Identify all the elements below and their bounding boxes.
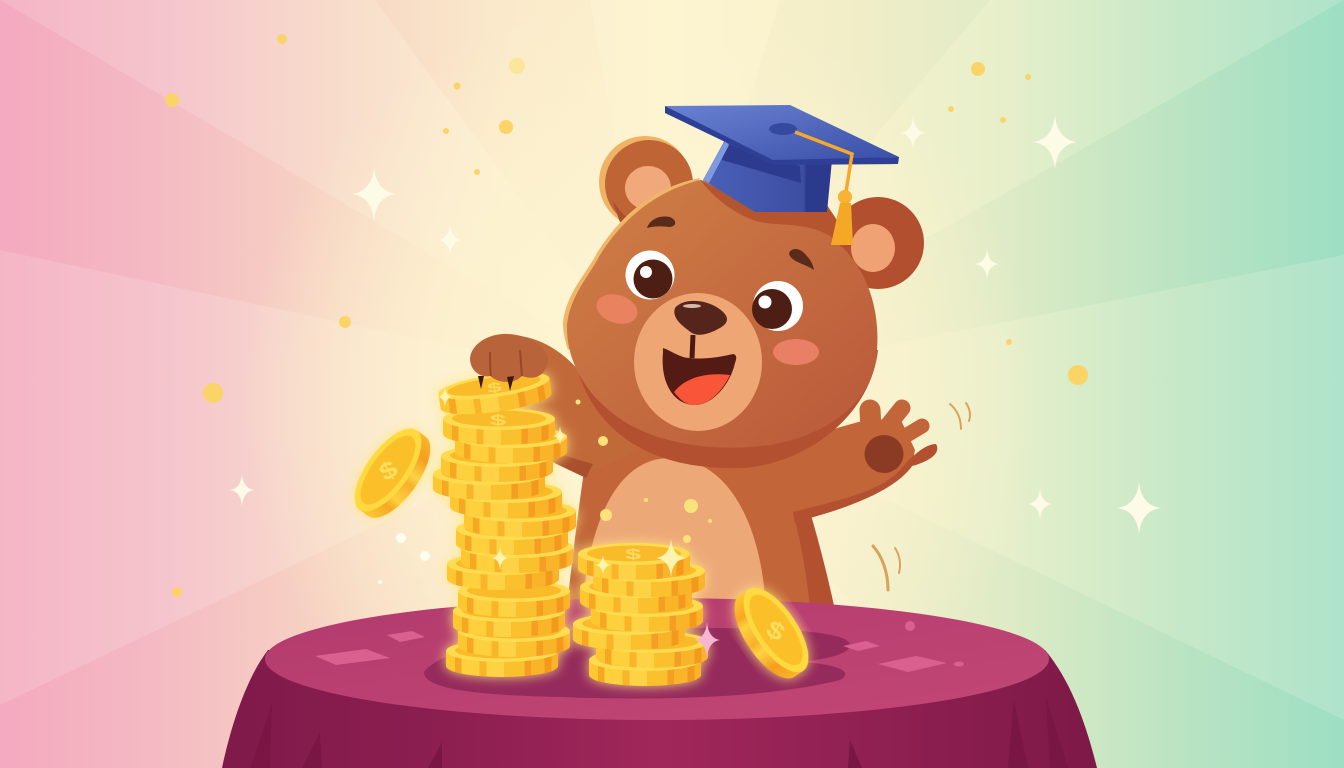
tassel <box>831 203 853 245</box>
dollar sign: $ <box>762 614 790 646</box>
head highlight rim <box>563 178 700 350</box>
left cheek <box>593 289 641 329</box>
muzzle <box>634 293 762 431</box>
arm underside <box>793 444 937 522</box>
dollar sign on short stack: $ <box>625 545 641 562</box>
right flying coin <box>722 578 821 689</box>
right cheek <box>773 339 819 365</box>
table diamonds <box>315 621 964 672</box>
button <box>769 123 797 135</box>
short coin stack <box>573 543 708 686</box>
white dots near flying coin <box>378 533 430 584</box>
table top shadow <box>424 628 850 698</box>
palm pad <box>864 435 904 473</box>
coin sparkles <box>438 387 720 658</box>
tilted top coin: $ <box>486 380 503 396</box>
chin shadow <box>578 350 878 468</box>
skirt folds <box>250 698 1068 768</box>
cap base light edge <box>703 141 729 183</box>
open mouth <box>663 348 736 405</box>
left flying coin <box>342 418 443 528</box>
tongue <box>674 374 730 405</box>
bear paw on coin <box>470 334 548 391</box>
tilted top coin <box>437 367 553 420</box>
nose <box>674 301 727 335</box>
head shape <box>567 180 877 448</box>
tassel knob <box>838 190 852 204</box>
body side shadow <box>793 505 838 625</box>
right eyebrow <box>789 249 814 270</box>
board underside <box>665 106 899 165</box>
tall coin stack <box>433 367 576 677</box>
nose highlight <box>683 304 701 308</box>
fingers <box>870 408 922 438</box>
left ear <box>599 136 693 228</box>
table skirt <box>222 650 1097 768</box>
waving right arm <box>790 408 937 522</box>
right ear <box>832 197 924 289</box>
glitter on belly <box>576 400 712 543</box>
graduation cap <box>665 105 899 245</box>
table <box>222 598 1097 768</box>
motion lines near paw <box>873 403 970 590</box>
right eye <box>752 281 803 331</box>
table top <box>265 598 1049 720</box>
background sparkles <box>230 115 1161 534</box>
left eye <box>626 250 674 300</box>
dollar sign on stack: $ <box>490 411 506 428</box>
head <box>563 178 878 468</box>
body <box>565 430 838 625</box>
claws <box>478 376 484 389</box>
belly <box>582 458 766 620</box>
board top <box>665 105 899 160</box>
hat shadow on head <box>700 180 850 248</box>
raised left arm <box>490 335 650 478</box>
cap base top shade <box>722 143 801 183</box>
bear <box>490 105 937 625</box>
tassel cord <box>795 132 852 192</box>
left eyebrow <box>647 216 675 228</box>
floating gold dots <box>165 34 1088 597</box>
dollar sign: $ <box>374 454 402 486</box>
cap base <box>703 140 832 212</box>
philtrum line <box>692 335 693 358</box>
